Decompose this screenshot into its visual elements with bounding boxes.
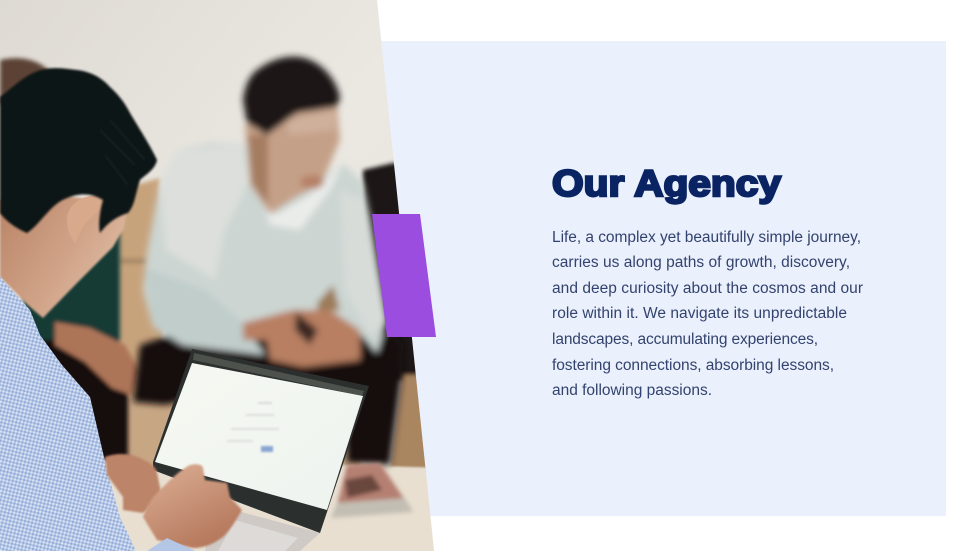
magazine bbox=[331, 463, 413, 518]
heading: Our Agency bbox=[552, 163, 781, 204]
laptop toolbar bbox=[193, 353, 364, 396]
purple accent bbox=[372, 214, 436, 337]
table bbox=[100, 465, 440, 551]
hair bbox=[243, 57, 340, 135]
login form bbox=[227, 402, 279, 452]
hair highlights bbox=[100, 120, 145, 185]
left hand bbox=[105, 454, 162, 513]
body text: Life, a complex yet beautifully simple journey, bbox=[552, 229, 861, 246]
blurred man bbox=[133, 57, 403, 465]
laptop base bbox=[205, 512, 320, 551]
seated woman bbox=[20, 232, 140, 460]
body text: fostering connections, absorbing lessons, bbox=[552, 357, 834, 374]
couch gap bbox=[317, 285, 340, 312]
laptop bbox=[153, 349, 369, 551]
body text bbox=[552, 229, 863, 399]
ear bbox=[67, 196, 105, 243]
laptop screen bbox=[155, 363, 363, 510]
laptop lid bbox=[153, 349, 369, 533]
hair bbox=[0, 68, 157, 233]
trousers bbox=[133, 335, 403, 465]
photo: team at work bbox=[0, 0, 440, 551]
face bbox=[245, 105, 340, 214]
shirt bbox=[143, 143, 387, 355]
body text: role within it. We navigate its unpredictable bbox=[552, 305, 847, 322]
cuff bbox=[147, 538, 195, 551]
body text: and deep curiosity about the cosmos and our bbox=[552, 280, 863, 297]
shirt bbox=[0, 277, 136, 551]
hands bbox=[243, 310, 360, 367]
neck and face bbox=[0, 195, 128, 318]
right hand bbox=[143, 464, 242, 548]
body text: landscapes, accumulating experiences, bbox=[552, 331, 818, 348]
wall bbox=[0, 0, 440, 551]
shirt highlights bbox=[160, 143, 250, 280]
foreground man bbox=[0, 68, 242, 551]
background furniture bbox=[0, 58, 440, 480]
body text: carries us along paths of growth, discovery, bbox=[552, 254, 850, 271]
body text: and following passions. bbox=[552, 382, 712, 399]
background panel bbox=[381, 41, 946, 516]
